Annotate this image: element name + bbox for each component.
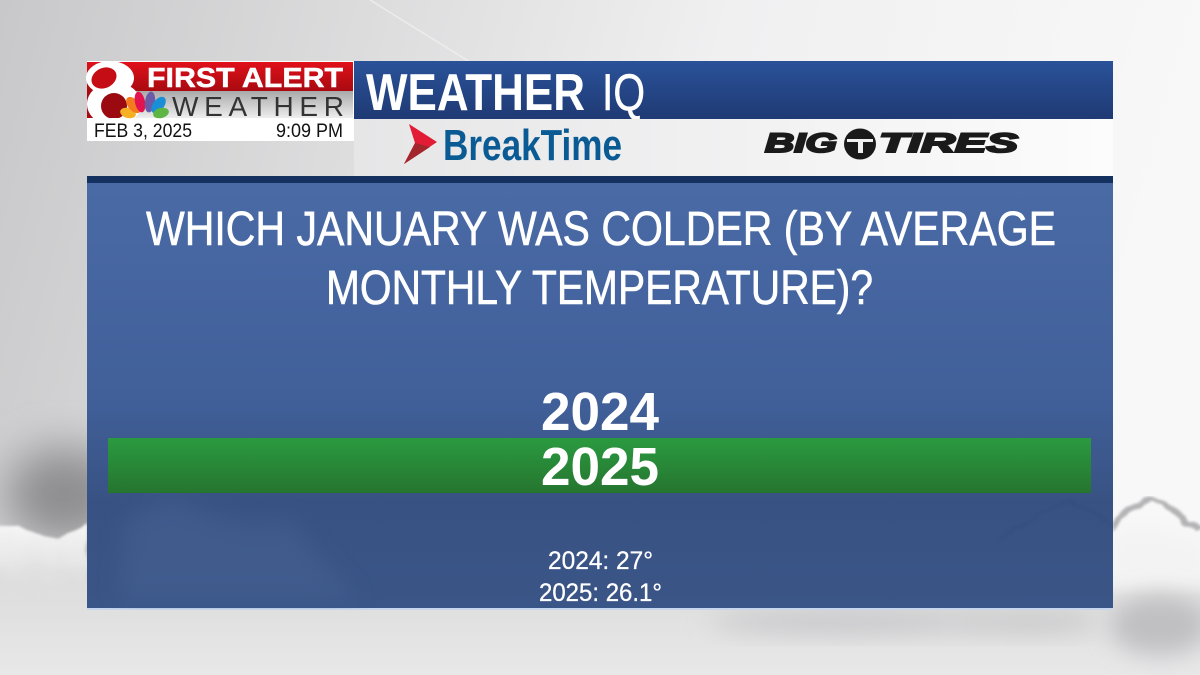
- grey Weather band: WEATHER: [172, 91, 344, 122]
- answer values: [539, 547, 662, 607]
- title: Weather: WEATHER: [366, 64, 585, 122]
- logo: Big O Tires: TIRES: [879, 128, 1018, 158]
- date: FEB 3, 2025: [94, 121, 192, 142]
- answer values: 2025: 26.1°: [539, 579, 662, 607]
- header bar: [354, 61, 1113, 122]
- title: IQ: IQ: [602, 64, 645, 122]
- navy divider: [87, 176, 1113, 183]
- logo: Big O Tires: BIG: [765, 128, 837, 158]
- option: 2024: 2024: [541, 382, 659, 442]
- channel 8 numeral: [86, 61, 141, 126]
- main panel: [87, 183, 1113, 610]
- logo: Big O Tires: [765, 128, 1018, 160]
- icon: peacock: [119, 91, 170, 120]
- logo: BreakTime: BreakTime: [443, 121, 622, 170]
- question heading: WHICH JANUARY WAS COLDER (BY AVERAGE: [146, 203, 1056, 256]
- faint clouds in panel: [122, 525, 351, 609]
- red First Alert band: [87, 62, 353, 93]
- logo: BreakTime: [404, 121, 622, 170]
- answer values: 2024: 27°: [548, 547, 653, 575]
- red First Alert band: FIRST ALERT: [147, 62, 343, 93]
- station logo block: [86, 61, 354, 142]
- option: 2025 highlighted: 2025: [541, 437, 659, 497]
- question heading: MONTHLY TEMPERATURE)?: [326, 262, 873, 315]
- grey Weather band: [87, 91, 353, 122]
- sponsor strip: [354, 119, 1113, 176]
- time: 9:09 PM: [276, 121, 343, 142]
- option: 2025 highlighted: [108, 437, 1091, 497]
- question heading: [146, 203, 1056, 315]
